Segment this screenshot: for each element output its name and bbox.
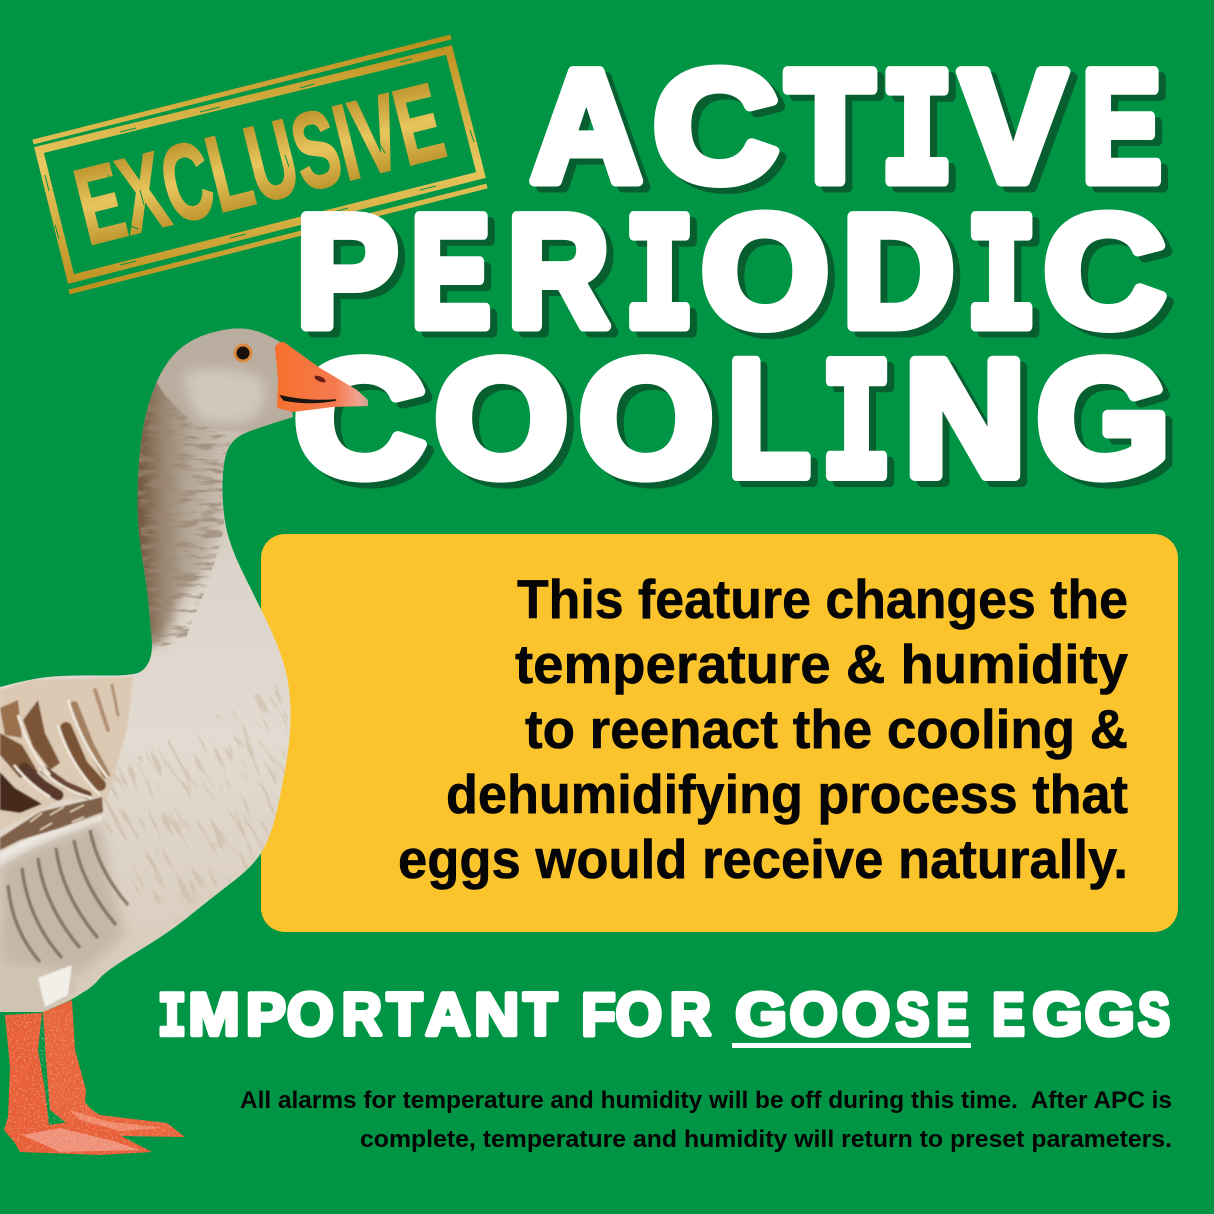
subheading: P: [246, 981, 286, 1048]
stamp: exclusive: [33, 37, 487, 292]
footnote: All alarms for temperature and humidity will be off during this time. After APC is: [240, 1087, 1172, 1114]
subheading: O: [790, 981, 838, 1048]
stamp: exclusive: EXCLUSIVE: [64, 60, 455, 267]
footnote: [240, 1087, 1172, 1153]
description text: This feature changes the: [517, 568, 1128, 630]
footnote: complete, temperature and humidity will return to preset parameters.: [360, 1126, 1172, 1153]
subheading: F: [581, 981, 616, 1048]
subheading: E: [992, 981, 1025, 1048]
title line: cooling: L: [727, 326, 810, 512]
stamp distress marks: [45, 59, 474, 265]
subheading: R: [342, 981, 382, 1048]
subheading: G: [1085, 981, 1135, 1048]
subheading: [158, 981, 1170, 1054]
title line: periodic: E: [411, 182, 491, 360]
title line: cooling: N: [904, 326, 1026, 512]
goose wing: [0, 677, 133, 1012]
subheading: O: [287, 981, 334, 1048]
title line: cooling: C: [294, 326, 426, 512]
title line: cooling: O: [579, 326, 714, 512]
subheading: R: [670, 981, 711, 1048]
description text: temperature & humidity: [515, 633, 1128, 695]
subheading: O: [616, 981, 662, 1048]
subheading: M: [188, 981, 240, 1048]
title line: active: C: [653, 37, 778, 215]
subheading: G: [735, 981, 787, 1048]
title line: periodic: P: [296, 182, 398, 360]
subheading: G: [1032, 981, 1082, 1048]
subheading: N: [474, 981, 519, 1048]
title line: periodic: R: [507, 182, 609, 360]
title line: active: E: [1082, 37, 1162, 215]
goose illustration: [0, 322, 379, 1160]
goose head: [155, 322, 293, 432]
goose mouth: [281, 396, 336, 402]
goose neck shading: [137, 360, 236, 652]
title line: cooling: O: [434, 326, 568, 512]
goose body: [0, 329, 293, 1012]
title line: cooling: I: [820, 332, 892, 528]
description text: to reenact the cooling &: [525, 698, 1128, 760]
panel: description: [261, 534, 1178, 932]
goose beak: [275, 342, 368, 412]
subheading: S: [1138, 981, 1170, 1048]
subheading: E: [936, 981, 969, 1048]
description text: eggs would receive naturally.: [398, 828, 1128, 890]
title line: periodic: C: [1044, 182, 1166, 360]
title line: active: A: [531, 37, 642, 215]
goose cheek: [182, 368, 265, 424]
title: [294, 37, 1170, 528]
description text: dehumidifying process that: [446, 763, 1128, 825]
goose flank white bar: [0, 815, 104, 866]
title line: periodic: O: [701, 182, 829, 360]
goose flank: [0, 822, 125, 975]
title line: active: I: [880, 43, 954, 231]
goose breast feather texture: [99, 684, 289, 936]
subheading: A: [426, 981, 470, 1048]
title line: periodic: D: [842, 182, 954, 360]
subheading: T: [523, 981, 557, 1048]
subheading: S: [896, 981, 929, 1048]
description text: [398, 568, 1128, 890]
leg scale texture: [0, 1010, 190, 1160]
goose nostril: [314, 374, 326, 384]
subheading: I: [158, 983, 186, 1054]
title line: periodic: I: [624, 188, 695, 376]
goose eye: [234, 344, 252, 362]
goose legs and feet: [0, 1000, 190, 1160]
goose neck wrinkles: [138, 406, 230, 649]
subheading: T: [387, 981, 422, 1048]
title line: active: V: [960, 37, 1066, 215]
title line: cooling: G: [1036, 326, 1170, 512]
subheading: O: [842, 981, 890, 1048]
title line: active: T: [786, 37, 874, 215]
title line: periodic: I: [966, 188, 1038, 376]
